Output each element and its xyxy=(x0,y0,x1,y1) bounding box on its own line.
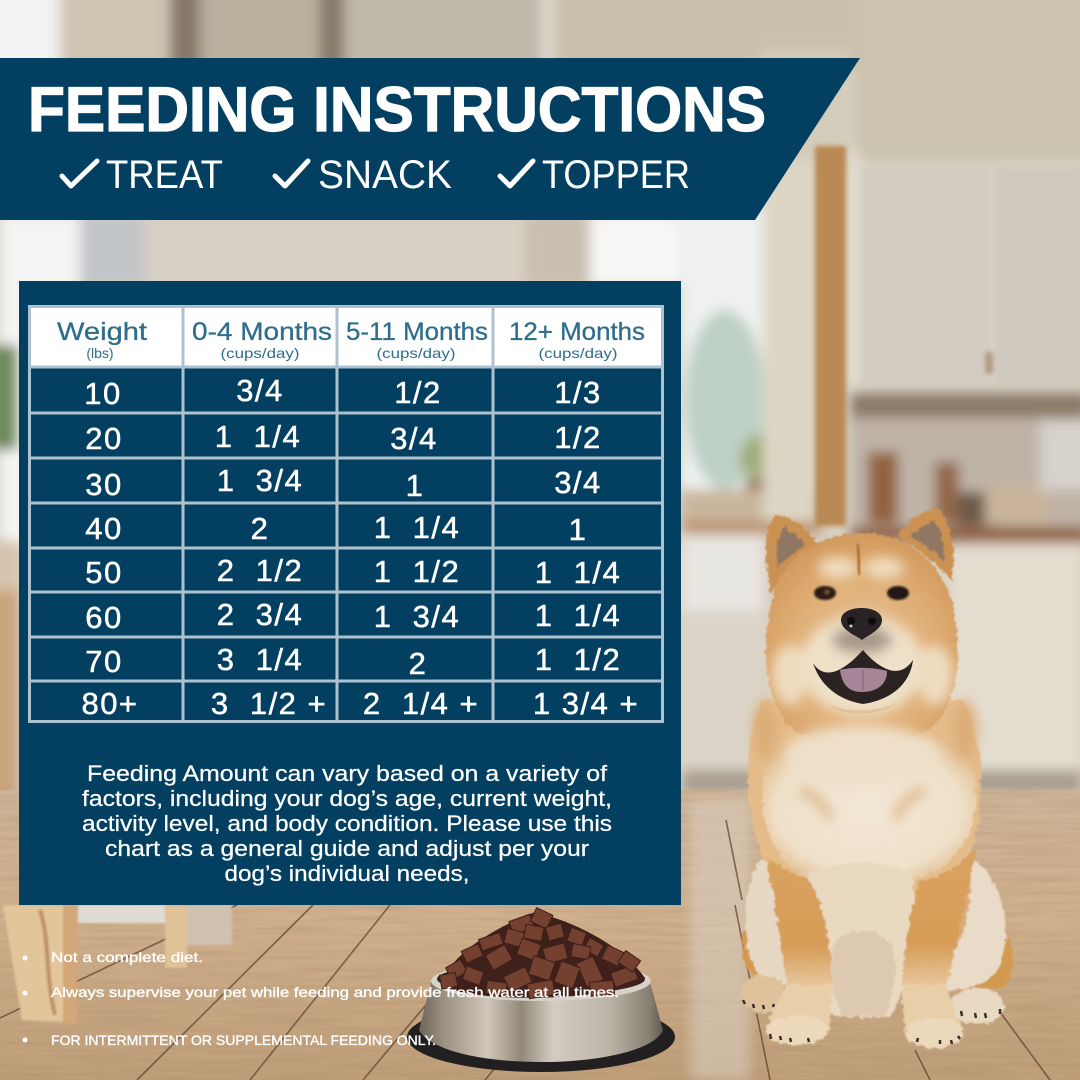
row 30 lbs: 3/4 xyxy=(554,465,602,500)
table header: 5-11 Months xyxy=(346,318,488,346)
feeding note paragraph: Feeding Amount can vary based on a variety of xyxy=(87,761,608,786)
table header: 12+ Months xyxy=(509,318,645,346)
dog claws xyxy=(743,1000,1000,1044)
dog ears xyxy=(766,508,953,592)
table header: (cups/day) xyxy=(538,345,618,361)
row 10 lbs: 3/4 xyxy=(236,373,284,408)
row 40 lbs: 2 xyxy=(251,511,269,546)
row 40 lbs xyxy=(85,510,587,547)
benefit: treat xyxy=(62,153,223,197)
bowl rim xyxy=(431,961,651,1001)
row 80+ lbs: 80+ xyxy=(81,686,139,721)
kibble pile xyxy=(440,908,645,999)
dog front legs xyxy=(767,848,977,985)
table header: Weight xyxy=(57,318,147,346)
dog torso xyxy=(748,700,981,1018)
row 60 lbs xyxy=(85,597,621,635)
row 80+ lbs: 2 1/4 + xyxy=(363,686,479,721)
wood floor xyxy=(0,790,1080,1080)
row 80+ lbs: 3 1/2 + xyxy=(211,686,327,721)
dog xyxy=(740,508,1013,1048)
row 30 lbs: 1 xyxy=(406,468,424,503)
disclaimer bullet list: FOR INTERMITTENT OR SUPPLEMENTAL FEEDING ONLY. xyxy=(51,1032,436,1048)
row 10 lbs: 1/2 xyxy=(394,375,442,410)
dog brow crease xyxy=(857,544,860,575)
heading: FEEDING INSTRUCTIONS xyxy=(28,75,766,145)
wooden stool legs xyxy=(3,905,232,1023)
dog mouth and tongue xyxy=(813,650,913,714)
panel: feeding chart xyxy=(19,281,681,905)
feeding note paragraph: factors, including your dog’s age, current weight, xyxy=(82,786,612,811)
feeding note paragraph: dog’s individual needs, xyxy=(224,861,470,886)
row 20 lbs: 1/2 xyxy=(554,420,602,455)
disclaimer bullet list: Always supervise your pet while feeding and provide fresh water at all times. xyxy=(51,984,619,1000)
row 30 lbs: 1 3/4 xyxy=(217,463,303,498)
dog hindquarters xyxy=(742,855,1013,990)
dog head xyxy=(766,533,959,748)
row 30 lbs: 30 xyxy=(85,467,123,502)
row 20 lbs: 1 1/4 xyxy=(215,419,301,454)
feeding note paragraph: chart as a general guide and adjust per your xyxy=(105,836,589,861)
row 60 lbs: 1 1/4 xyxy=(535,598,621,633)
row 40 lbs: 40 xyxy=(85,511,123,546)
row 10 lbs: 10 xyxy=(84,376,122,411)
row 60 lbs: 2 3/4 xyxy=(217,597,303,632)
benefit: snack: SNACK xyxy=(318,153,452,197)
row 70 lbs xyxy=(85,642,621,681)
table header xyxy=(57,318,645,361)
row 10 lbs xyxy=(84,373,602,411)
table header: (cups/day) xyxy=(376,345,456,361)
row 80+ lbs: 1 3/4 + xyxy=(533,686,639,721)
row 10 lbs: 1/3 xyxy=(554,375,602,410)
row 50 lbs: 1 1/2 xyxy=(374,554,460,589)
row 70 lbs: 70 xyxy=(85,644,123,679)
dog paws xyxy=(740,975,1004,1048)
benefit: treat: TREAT xyxy=(106,153,223,197)
table header: 0-4 Months xyxy=(192,318,332,346)
row 80+ lbs xyxy=(81,686,639,721)
bowl base ring xyxy=(407,1002,675,1072)
row 70 lbs: 2 xyxy=(409,646,427,681)
row 70 lbs: 3 1/4 xyxy=(217,642,303,677)
wood post and wall cabinets xyxy=(815,146,1080,526)
row 50 lbs: 50 xyxy=(85,555,123,590)
food bowl xyxy=(407,908,675,1072)
row 70 lbs: 1 1/2 xyxy=(535,642,621,677)
row 60 lbs: 60 xyxy=(85,600,123,635)
row 50 lbs xyxy=(85,553,621,590)
title banner xyxy=(0,58,860,220)
dog eyes xyxy=(814,586,909,600)
row 40 lbs: 1 xyxy=(569,512,587,547)
row 20 lbs: 3/4 xyxy=(390,421,438,456)
feeding table xyxy=(29,306,663,722)
row 30 lbs xyxy=(85,463,602,503)
table header: (cups/day) xyxy=(220,345,300,361)
disclaimer bullet list: Not a complete diet. xyxy=(51,949,203,965)
feeding note paragraph xyxy=(82,761,612,886)
row 20 lbs xyxy=(85,419,602,456)
dog nose xyxy=(841,608,882,640)
bowl steel wall xyxy=(419,982,663,1062)
table header: (lbs) xyxy=(86,345,114,361)
row 20 lbs: 20 xyxy=(85,421,123,456)
feeding note paragraph: activity level, and body condition. Please use this xyxy=(82,811,612,836)
dog neck ruff and face markings xyxy=(753,557,977,820)
row 50 lbs: 1 1/4 xyxy=(535,555,621,590)
benefit: topper: TOPPER xyxy=(542,153,690,197)
disclaimer bullet list xyxy=(22,949,619,1048)
row 60 lbs: 1 3/4 xyxy=(374,599,460,634)
row 40 lbs: 1 1/4 xyxy=(374,510,460,545)
row 50 lbs: 2 1/2 xyxy=(217,553,303,588)
